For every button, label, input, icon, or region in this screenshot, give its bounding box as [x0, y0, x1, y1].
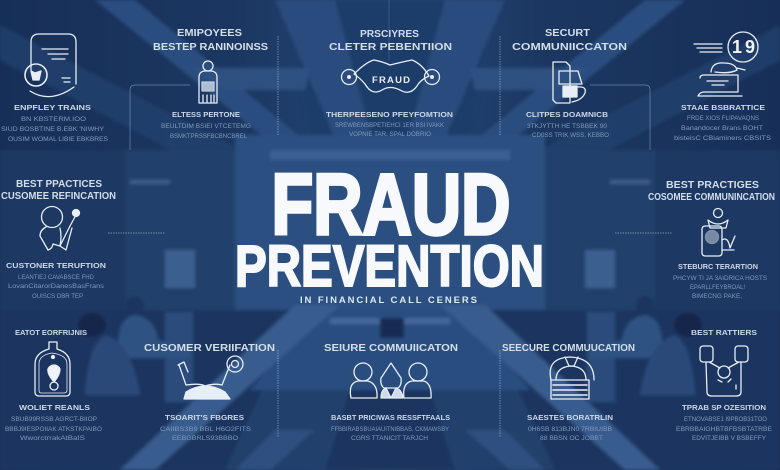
panel: secure communication center: BASBT PRICIWAS RESSFTFAALS — [331, 413, 450, 422]
panel: secure communication right: SEECURE COMMUUCATION — [502, 343, 635, 354]
office silhouettes — [126, 296, 144, 314]
panel: employee training: OUSIM WOMAL LIBIE EBKBRES — [8, 136, 108, 143]
panel: center prevention: VOPNIE TAR. SPAL DOBRIO — [349, 131, 431, 138]
panel: customer communication right — [648, 180, 775, 300]
panel: employee best training: BEULTDIM BSIEI VTCETEMG — [161, 123, 251, 130]
panel: secure communication center: FFBBIRABSBUAIAUITNIBBAS. CKMAWSBY — [331, 426, 449, 433]
icon: dome and striped box — [550, 357, 594, 399]
panel: employee training — [1, 34, 108, 143]
panel: customer communication right: BIMECNG PAKE, — [692, 293, 742, 300]
panel: customer communication right: STEBURC TERARTION — [678, 262, 758, 271]
icon: 19 circle and device: 19 — [732, 37, 755, 57]
panel: customer communication right: PHCYW TI JA 3AIDRICA HOSTS — [673, 275, 767, 282]
panel: customer verification left — [1, 179, 116, 300]
panel: secure communication top: CD0SS TRIK WSS. KEBBO — [532, 132, 609, 139]
title: IN FINANCIAL CALL CENERS — [300, 295, 477, 306]
panel: secure communication center — [324, 343, 458, 442]
panel: secure communication right: SAESTES BORATRLIN — [527, 413, 613, 422]
icon: three people — [350, 363, 431, 398]
panel: bottom right: TPRAB SP OZESITION — [682, 403, 766, 412]
icon: tag with pin — [35, 342, 70, 396]
panel: center prevention: SREWBENSBPETIEHCI 1ER BSI IVAKK — [335, 122, 444, 129]
panel: secure communication right — [502, 343, 635, 442]
panel: secure communication top — [512, 28, 627, 139]
panel: employee best training: BESTEP RANINOINSS — [153, 42, 268, 53]
icon: shield with handles — [700, 346, 748, 396]
panel: bottom left: EATOT EORFRIJNIS — [15, 328, 87, 337]
panel: customer communication right: EPARLLFEYBROAL! — [690, 284, 745, 291]
panel: secure communication center: CGRS TTANICIT TARJCH — [351, 435, 428, 442]
panel: bottom right: ETNOVABSE1 I9PBOB31TOO — [684, 416, 767, 423]
panel: customer verification left: CUSOMEE REFINCATION — [1, 191, 116, 202]
icon: bottle — [199, 61, 217, 103]
panel: customer verification bottom: CUSOMER VERIIFATION — [144, 343, 275, 354]
panel: employee best training: EMIPOYEES — [177, 28, 242, 39]
title — [235, 157, 544, 306]
panel: employee best training: ELTESS PERTONE — [172, 110, 240, 119]
icon: person with tool — [40, 206, 80, 250]
panel: center prevention: PRSCIYRES — [360, 29, 419, 40]
frame lines and dotted dividers — [108, 0, 672, 437]
panel: top right statistic: bisteisC CBiaminers CBSITS — [674, 135, 772, 142]
panel: center prevention: CLETER PEBENTIION — [329, 42, 452, 53]
panel: employee best training: BSMKTPRSSFBCBNCBREL — [170, 133, 247, 140]
panel: employee training: SIUD BOSBTINE B.EBK 'NIWHY — [1, 126, 104, 133]
panel: center prevention: THERPEESENO PFEYFOMTION — [326, 110, 453, 119]
panel: bottom right: EDVITJEIBB V BSBEFFY — [692, 435, 766, 442]
panel: center prevention — [326, 29, 453, 138]
panel: customer verification left: OUISCS DBR TEP — [32, 293, 83, 300]
panel: bottom left: WworctrrakAtBaIS — [20, 435, 86, 442]
panel: secure communication top: 3TKJYTTH HE TSBBEK 90 — [527, 123, 607, 130]
icon: person and phone — [702, 208, 735, 256]
panel: employee best training — [153, 28, 268, 140]
panel: bottom right: EBRBBAIGHBTBFBSBTATRBE — [676, 426, 772, 433]
panel: top right statistic: STAAE BSBRATTICE — [681, 103, 765, 112]
panel: top right statistic — [674, 32, 772, 142]
panel: bottom left: WOLIET REANLS — [19, 403, 90, 412]
panel: secure communication right: 0H6SB 813BJN0 7RBIUIBB — [528, 426, 612, 433]
panel: bottom right — [676, 328, 772, 442]
panel: secure communication top: COMMUNIICCATON — [512, 42, 627, 53]
panel: customer communication right: BEST PRACTIGES — [666, 180, 759, 191]
panel: customer verification left: LEANTIEJ CAVABSCE FHD — [18, 274, 94, 281]
panel: bottom left — [5, 328, 102, 442]
panel: customer verification left: CUSTONER TERUFTION — [6, 261, 106, 270]
panel: customer verification left: BEST PPACTICES — [16, 179, 102, 190]
panel: customer verification bottom: TSOARIT'S FBGRES — [165, 413, 244, 422]
panel: top right statistic: Banandocer Brans BOHT — [681, 125, 763, 132]
panel: bottom right: BEST RATTIERS — [691, 328, 757, 337]
panel: bottom left: BBBJ9IESPOIIAK ATKSTKPAIBO — [5, 426, 102, 433]
title: FRAUD — [272, 157, 510, 253]
panel: top right statistic: FRDE XIOS FLIPAVAQNS — [687, 115, 759, 122]
panel: employee training: ENPFLEY TRAINS — [14, 103, 91, 112]
icon: document badge — [25, 34, 76, 97]
icon: robotic arms — [178, 356, 243, 399]
panel: secure communication center: SEIURE COMMUIICATON — [324, 343, 458, 354]
panel: bottom left: SBUB99RSSB AGRCT-BIIOP — [11, 416, 97, 423]
panel: customer verification bottom: CAIIBS3B9 BBL H6O2FITS — [160, 426, 252, 433]
icon: fraud badge: FRAUD — [372, 75, 410, 86]
title: PREVENTION — [235, 234, 544, 299]
panel: secure communication top: CLITPES DOAMNICB — [526, 110, 609, 119]
panel: customer verification left: LovanCitarorDanesBasFrans — [8, 283, 105, 290]
icon: phone device — [553, 62, 585, 103]
panel: employee training: BN KBSTERM.IOO — [21, 116, 86, 123]
panel: secure communication right: 88 BBSN OC JOBBT — [540, 435, 603, 442]
panel: secure communication top: SECURT — [545, 28, 590, 39]
panel: customer verification bottom — [144, 343, 275, 442]
panel: customer verification bottom: EEBGBRLS93BBBO — [172, 435, 238, 442]
